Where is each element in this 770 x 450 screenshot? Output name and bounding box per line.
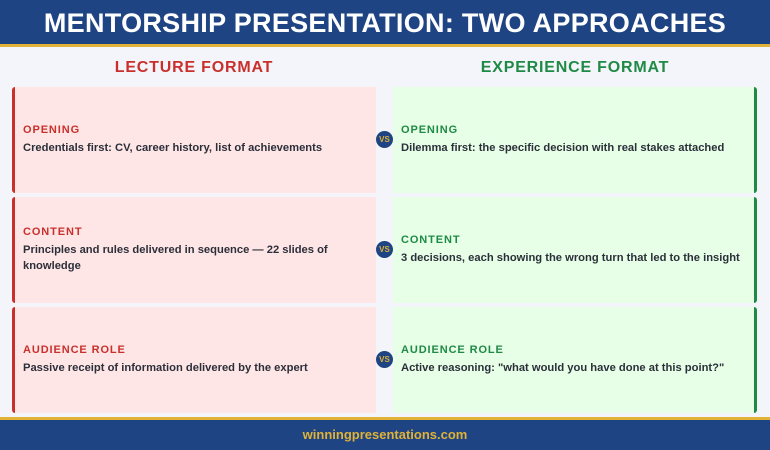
footer [0,417,770,450]
panel: experience content [393,197,757,303]
title [0,0,770,47]
panel: experience content: CONTENT [401,234,460,246]
panel: experience content: 3 decisions, each showing the wrong turn that led to the insight [401,252,740,264]
panel: lecture content: Principles and rules delivered in sequence — 22 slides of knowledge [23,244,328,272]
column title: experience: EXPERIENCE FORMAT [481,59,669,76]
panel: lecture audience role [12,307,376,413]
panel: lecture opening: OPENING [23,124,80,136]
panel: experience opening [393,87,757,193]
icon: vs 2: VS [379,245,390,254]
icon: vs 3 [376,351,393,368]
icon: vs 2 [376,241,393,258]
column title: lecture: LECTURE FORMAT [115,59,273,76]
panel: lecture opening: Credentials first: CV, career history, list of achievements [23,142,322,154]
panel: experience opening: Dilemma first: the specific decision with real stakes attached [401,142,724,154]
panel: lecture content [12,197,376,303]
panel: lecture opening [12,87,376,193]
panel: experience opening: OPENING [401,124,458,136]
panel: lecture audience role: AUDIENCE ROLE [23,344,126,356]
panel: lecture audience role: Passive receipt of information delivered by the expert [23,362,308,374]
icon: vs 3: VS [379,355,390,364]
panel: lecture content: CONTENT [23,226,82,238]
title: MENTORSHIP PRESENTATION: TWO APPROACHES [44,8,726,38]
footer: winningpresentations.com [303,427,467,442]
panel: experience audience role: Active reasoning: "what would you have done at this point?" [401,362,724,374]
panel: experience audience role [393,307,757,413]
icon: vs 1 [376,131,393,148]
panel: experience audience role: AUDIENCE ROLE [401,344,504,356]
icon: vs 1: VS [379,135,390,144]
